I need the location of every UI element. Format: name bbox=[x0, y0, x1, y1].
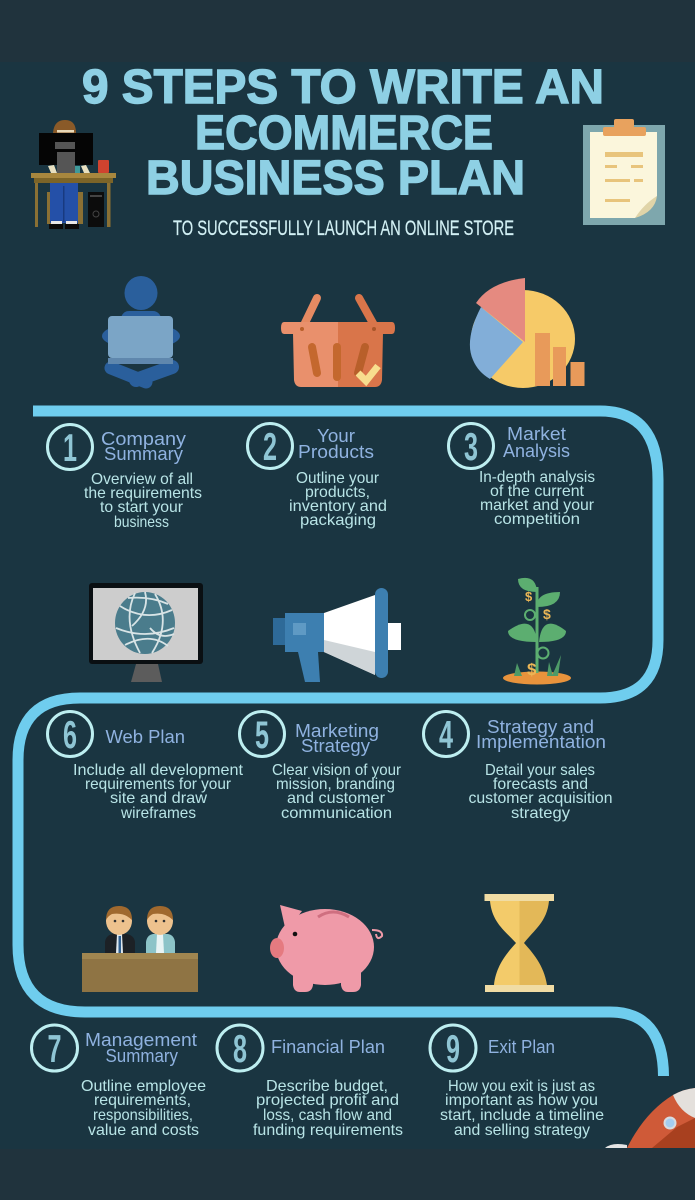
step 7 bbox=[32, 1025, 206, 1139]
step 1: to start your bbox=[100, 499, 184, 516]
step 2: Your bbox=[317, 426, 355, 446]
step 6: wireframes bbox=[120, 805, 196, 822]
icon: monitor with globe bbox=[89, 583, 203, 682]
step 7: Summary bbox=[106, 1046, 178, 1066]
step 4: 4 bbox=[439, 714, 453, 757]
step 5: and customer bbox=[287, 790, 386, 807]
step 3: In-depth analysis bbox=[479, 469, 595, 486]
step 2 bbox=[248, 424, 387, 529]
step 8: 8 bbox=[233, 1028, 247, 1071]
step 1: 1 bbox=[63, 427, 77, 470]
step 9: 9 bbox=[446, 1028, 460, 1071]
step 3: competition bbox=[494, 511, 580, 528]
step 9: How you exit is just as bbox=[448, 1078, 595, 1095]
step 3: market and your bbox=[480, 497, 595, 514]
step 4: Detail your sales bbox=[485, 762, 595, 779]
step 3: Analysis bbox=[503, 441, 570, 461]
step 7: value and costs bbox=[88, 1122, 199, 1139]
step 9 bbox=[430, 1025, 604, 1139]
step 7: 7 bbox=[48, 1028, 62, 1071]
step 7: Management bbox=[85, 1030, 197, 1050]
step 8: loss, cash flow and bbox=[263, 1107, 392, 1124]
step 1: Summary bbox=[104, 444, 183, 464]
step 5: Marketing bbox=[295, 721, 379, 741]
icon: money plant: $ bbox=[525, 589, 533, 604]
step 6 bbox=[48, 712, 244, 822]
icon: megaphone bbox=[273, 588, 401, 682]
icon: pie chart with bars bbox=[470, 278, 584, 388]
step 2: Products bbox=[298, 442, 374, 462]
step 8 bbox=[217, 1025, 403, 1139]
step 9: and selling strategy bbox=[454, 1122, 590, 1139]
step 1 bbox=[48, 424, 202, 531]
icon: rocket bbox=[605, 1088, 695, 1148]
step 3: of the current bbox=[490, 483, 585, 500]
step 2: inventory and bbox=[289, 498, 387, 515]
step 9: start, include a timeline bbox=[440, 1107, 604, 1124]
step 5: mission, branding bbox=[276, 776, 395, 793]
step 5: communication bbox=[281, 805, 392, 822]
icon: money plant: $ bbox=[543, 606, 551, 622]
step 4: Implementation bbox=[476, 732, 606, 752]
step 1: Company bbox=[101, 429, 186, 449]
icon: hourglass bbox=[484, 894, 554, 992]
title: 9 STEPS TO WRITE AN bbox=[82, 61, 604, 114]
step 8: projected profit and bbox=[256, 1092, 399, 1109]
step 7: responsibilities, bbox=[93, 1107, 193, 1124]
step 6: Include all development bbox=[73, 762, 244, 779]
step 1: business bbox=[114, 514, 169, 531]
step 2: Outline your bbox=[296, 470, 380, 487]
winding path bbox=[18, 411, 664, 1076]
step 7: Outline employee bbox=[81, 1078, 206, 1095]
step 3: Market bbox=[507, 424, 566, 444]
title: BUSINESS PLAN bbox=[146, 152, 525, 205]
step 9: important as how you bbox=[445, 1092, 598, 1109]
icon: clipboard bbox=[583, 119, 665, 225]
step 4: strategy bbox=[511, 805, 570, 822]
icon: two managers at desk bbox=[82, 906, 198, 992]
step 1: the requirements bbox=[84, 485, 202, 502]
step 6: site and draw bbox=[110, 790, 207, 807]
step 1: Overview of all bbox=[91, 471, 193, 488]
step 2: packaging bbox=[300, 512, 376, 529]
step 7: requirements, bbox=[94, 1092, 191, 1109]
step 6: requirements for your bbox=[85, 776, 232, 793]
step 8: funding requirements bbox=[253, 1122, 403, 1139]
step 6: 6 bbox=[63, 714, 77, 757]
step 3 bbox=[448, 424, 595, 528]
step 8: Describe budget, bbox=[266, 1078, 388, 1095]
step 6: Web Plan bbox=[106, 727, 185, 747]
step 5: Clear vision of your bbox=[272, 762, 402, 779]
step 9: Exit Plan bbox=[488, 1037, 555, 1057]
title bbox=[82, 61, 604, 205]
step 4: forecasts and bbox=[493, 776, 588, 793]
step 5 bbox=[240, 712, 402, 822]
icon: shopping basket bbox=[281, 298, 395, 387]
step 5: Strategy bbox=[301, 736, 370, 756]
subtitle: TO SUCCESSFULLY LAUNCH AN ONLINE STORE bbox=[173, 217, 514, 240]
step 8: Financial Plan bbox=[271, 1037, 385, 1057]
step 4: Strategy and bbox=[487, 717, 594, 737]
step 3: 3 bbox=[464, 426, 478, 469]
title: ECOMMERCE bbox=[195, 107, 493, 160]
icon: money plant: $ bbox=[527, 660, 537, 679]
icon: piggy bank bbox=[270, 905, 382, 992]
step 4: customer acquisition bbox=[468, 790, 612, 807]
icon: money plant bbox=[503, 578, 571, 684]
step 2: 2 bbox=[263, 426, 277, 469]
step 5: 5 bbox=[255, 714, 269, 757]
step 2: products, bbox=[305, 484, 370, 501]
icon: person with laptop bbox=[102, 276, 180, 382]
icon: person at desk bbox=[31, 120, 116, 229]
step 4 bbox=[424, 712, 612, 822]
